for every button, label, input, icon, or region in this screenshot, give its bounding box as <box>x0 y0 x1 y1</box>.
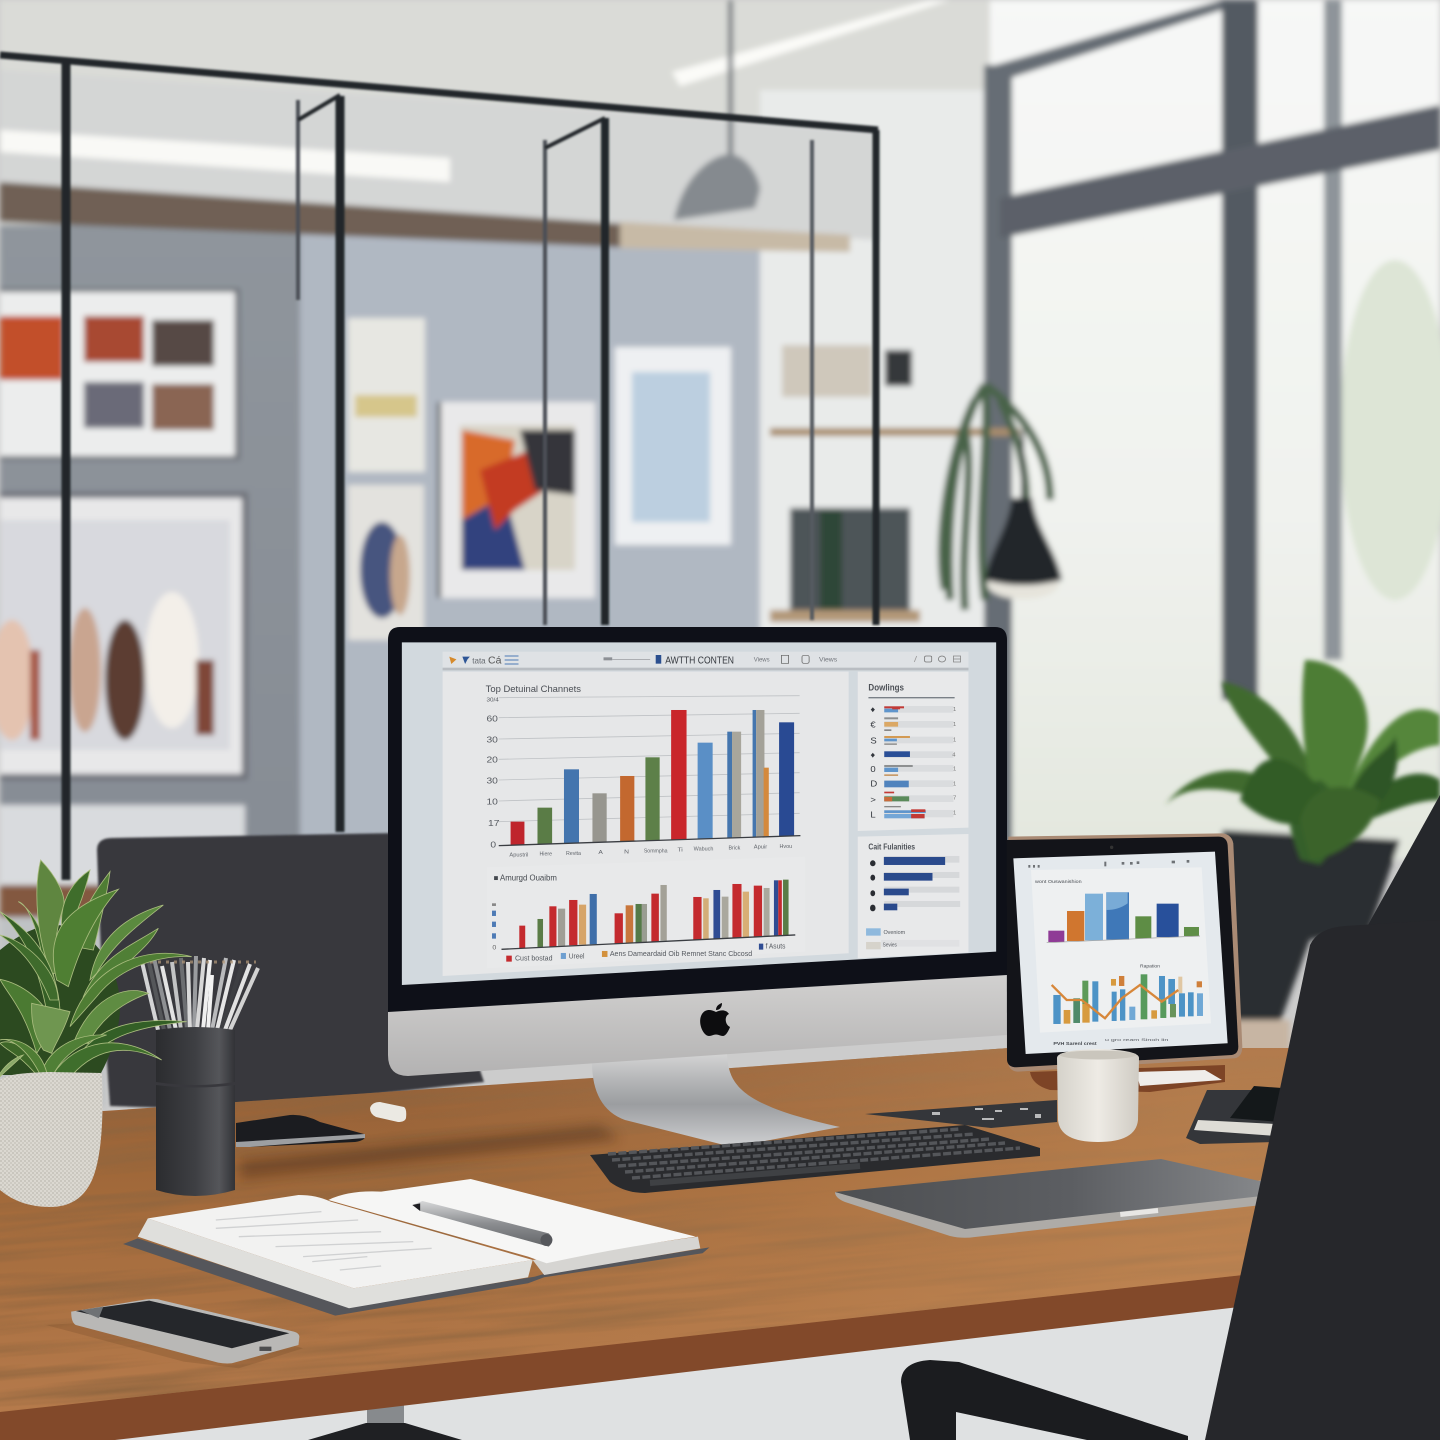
back desk band <box>0 885 105 917</box>
category bars <box>884 857 945 910</box>
picture yellow <box>348 318 425 472</box>
toolbar: Views <box>754 655 770 663</box>
bars <box>511 822 524 845</box>
pencils <box>142 956 258 1030</box>
tablet rim <box>1008 833 1242 1072</box>
right page <box>328 1179 696 1263</box>
potted plant <box>0 860 192 1207</box>
glass partition backdrop <box>300 225 780 845</box>
rank icons: L <box>870 810 876 819</box>
tablet footer right: u gro ream Sinoh lin <box>1105 1037 1168 1042</box>
x labels: Revita <box>566 850 581 857</box>
left page block <box>138 1218 533 1308</box>
hanging plant <box>942 385 1050 610</box>
tablet page <box>1031 867 1211 1033</box>
pen <box>412 1201 552 1247</box>
toolbar: AWTTH CONTEN <box>665 655 734 666</box>
wall picture bottom <box>0 805 245 890</box>
floor <box>0 1290 1250 1440</box>
tablet footer: PVH Sarenl crest <box>1053 1041 1097 1046</box>
picture figures <box>348 485 424 640</box>
left page <box>148 1195 533 1288</box>
window frame <box>984 0 1440 845</box>
right page block <box>533 1237 700 1275</box>
lower grouped bar chart: 0 <box>492 945 497 951</box>
wood grain <box>0 1048 1192 1405</box>
wooden desk top <box>0 1048 1288 1412</box>
panel: categories: Sevies <box>883 942 897 948</box>
window plant <box>1165 660 1440 865</box>
category tracks <box>884 856 960 907</box>
pen holder <box>142 956 258 1196</box>
x labels: Sommpha <box>644 848 668 854</box>
phone <box>46 1299 303 1368</box>
toolbar: Cá <box>488 655 502 666</box>
screen background <box>402 642 996 985</box>
main panel <box>443 672 849 976</box>
lower x axis <box>502 935 795 949</box>
monitor screen <box>402 642 996 985</box>
grey gallery wall <box>0 225 320 885</box>
y axis labels: 30/4 <box>486 698 500 703</box>
rank values: 1 <box>953 738 956 743</box>
y axis labels <box>486 698 500 850</box>
chair back <box>1205 920 1440 1440</box>
bezel <box>388 627 1007 1012</box>
y axis labels: 0 <box>490 840 496 850</box>
ceiling <box>0 0 1000 280</box>
chair headrest <box>1368 795 1440 925</box>
upper glass wall tint <box>0 70 878 240</box>
black pendant lamp <box>985 430 1062 599</box>
light right side <box>618 1048 1288 1332</box>
rank icons <box>870 705 877 819</box>
coffee mug <box>1057 1049 1139 1142</box>
toolbar: Views <box>819 655 838 663</box>
black tablet on desk <box>236 1115 365 1147</box>
chair armrest <box>901 1360 1188 1440</box>
chin <box>388 970 1007 1076</box>
white eraser <box>370 1102 406 1122</box>
holder upper <box>156 1027 235 1085</box>
grey strip left under desk band <box>0 917 105 1107</box>
background office chair <box>97 833 484 1110</box>
y axis labels: 10 <box>486 797 498 807</box>
tablet lower chart title: Rapation <box>1140 963 1161 968</box>
rankings heading: Dowlings <box>868 683 904 693</box>
main bar chart <box>486 685 800 858</box>
room dark chair silhouettes right <box>1222 830 1400 1050</box>
open notebook <box>123 1179 709 1316</box>
ceiling pendant lamp <box>674 0 760 220</box>
rank icons: > <box>870 795 876 804</box>
metal shelf unit <box>770 345 1020 622</box>
desk base <box>308 1404 462 1440</box>
holder lower <box>156 1085 235 1196</box>
wall picture top left <box>0 288 240 460</box>
tablet <box>1007 833 1242 1072</box>
rank values: 1 <box>953 782 956 787</box>
black card on desk <box>865 1100 1057 1128</box>
x labels: Ti <box>677 847 683 853</box>
legend <box>506 941 785 962</box>
abstract painting <box>437 402 595 598</box>
x labels: Brick <box>728 845 741 851</box>
y axis labels: 30 <box>486 735 498 745</box>
legend: Aens Dameardaid Oib Remnet Stanc Cbcosd <box>610 949 752 958</box>
ceiling light left <box>0 130 450 182</box>
rank icons: S <box>870 736 877 745</box>
legend: Cust bostad <box>515 953 553 962</box>
pale shelf right <box>620 222 850 252</box>
back area wood right <box>1010 1020 1290 1060</box>
blurred office background <box>0 0 1440 1107</box>
pot <box>0 1072 103 1207</box>
desktop monitor <box>388 627 1007 1076</box>
x labels: A <box>598 849 604 856</box>
desk surface <box>0 1040 1300 1430</box>
rank values: 4 <box>952 753 956 758</box>
panel: categories: Oveniom <box>883 929 905 936</box>
tablet toolbar marks <box>1028 860 1189 868</box>
tablet screen <box>1013 852 1228 1054</box>
x labels: Hvou <box>779 843 793 850</box>
pale blue painting <box>615 347 731 545</box>
rank values: 1 <box>953 811 956 816</box>
desk foot <box>308 1423 462 1440</box>
apple logo icon <box>700 1003 730 1036</box>
notebook and phone group <box>46 1179 709 1368</box>
panel: categories <box>858 834 968 958</box>
wooden shelf <box>0 182 640 248</box>
group bars <box>519 926 525 948</box>
desk stem <box>367 1404 404 1428</box>
right office chair <box>901 795 1440 1440</box>
windows <box>990 0 1440 860</box>
legend: Ureel <box>569 951 585 960</box>
lower grouped bar chart <box>487 857 805 968</box>
x labels: Hiere <box>539 851 553 857</box>
main chart title: Top Detuinal Channets <box>486 685 581 695</box>
y axis labels: 17 <box>488 819 499 829</box>
x labels <box>509 843 793 858</box>
x labels: Wabuch <box>694 846 714 852</box>
desk front edge <box>0 1273 1243 1440</box>
wall picture lower left <box>0 492 248 780</box>
rank icons: D <box>870 779 877 788</box>
y axis labels: 60 <box>486 714 498 724</box>
rank icons: 0 <box>870 765 876 774</box>
y ticks <box>492 903 496 939</box>
toolbar: tata <box>472 656 486 666</box>
white side wall <box>760 90 1000 850</box>
ceiling light right <box>672 0 950 86</box>
dark streak <box>240 1125 620 1180</box>
categories heading: Cait Fulanities <box>868 842 915 851</box>
white paper under tablet <box>1136 1070 1222 1086</box>
category icons <box>870 860 876 911</box>
rank values <box>952 707 956 816</box>
pencil tips <box>142 960 256 964</box>
closed laptop <box>835 1159 1264 1238</box>
rank values: 7 <box>953 796 956 801</box>
y axis labels: 20 <box>486 755 498 765</box>
x labels: Apustril <box>509 852 528 858</box>
x labels: N <box>624 849 629 855</box>
tablet lower bars <box>1052 974 1203 1024</box>
ranking bars <box>884 706 904 708</box>
window outlook greenery <box>1340 260 1440 600</box>
category legend <box>866 928 881 936</box>
camera <box>1110 846 1113 849</box>
leaves <box>0 860 192 1083</box>
x labels: Apuir <box>754 844 767 850</box>
y axis labels: 30 <box>486 776 498 786</box>
rank values: 1 <box>953 767 956 772</box>
monitor stand <box>592 1052 840 1147</box>
rank icons: ♦ <box>870 705 876 714</box>
plant dark center <box>0 925 120 1075</box>
handwriting <box>216 1212 432 1270</box>
toolbar <box>443 652 968 670</box>
keyboard <box>590 1125 1040 1193</box>
rank icons: ♦ <box>870 750 876 759</box>
rank icons: € <box>870 720 876 729</box>
gridlines <box>499 696 800 822</box>
black metal glass frame <box>0 55 878 880</box>
rank values: 1 <box>953 707 956 713</box>
tablet top bars <box>1047 892 1200 943</box>
cover <box>123 1238 709 1316</box>
x axis <box>499 836 800 846</box>
tablet chart title: wont Ouswanishion <box>1035 879 1082 884</box>
legend: f Asuts <box>766 941 785 950</box>
panel: rankings <box>858 672 968 831</box>
wooden tablet base <box>1030 1065 1225 1092</box>
tracks <box>884 706 953 817</box>
lower chart title: ■ Amurgd Ouaibm <box>494 873 557 882</box>
rank values: 1 <box>953 722 956 728</box>
tablet body <box>1007 837 1238 1067</box>
notebook and phone stack right <box>1186 1086 1282 1144</box>
